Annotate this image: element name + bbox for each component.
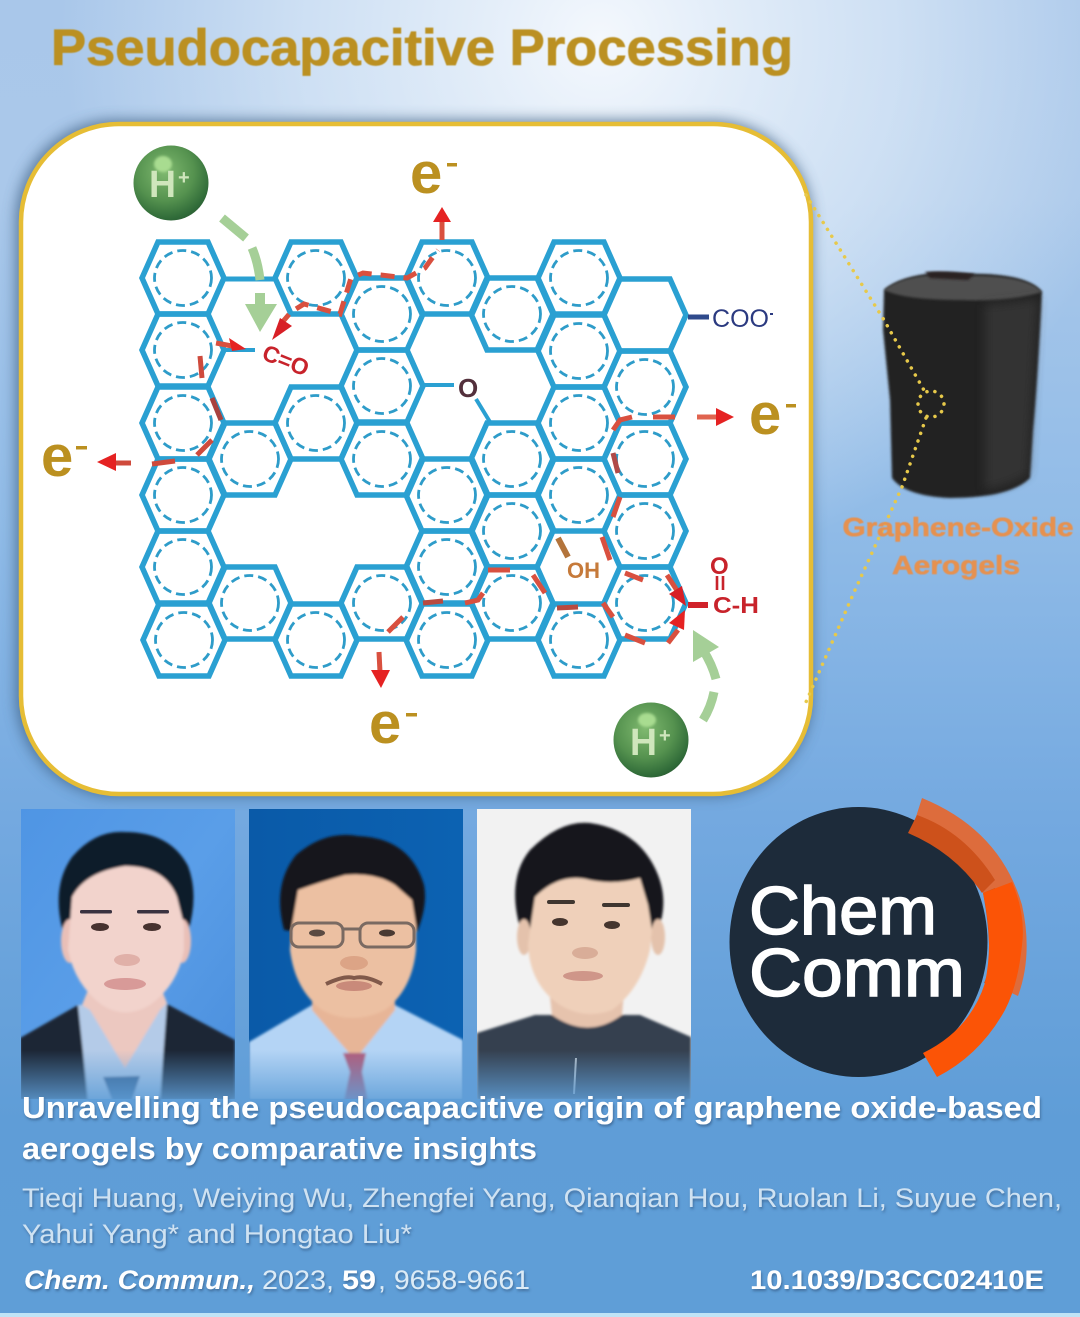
- icon: H+ proton top: [134, 146, 208, 220]
- citation: Chem. Commun.,: [24, 1265, 255, 1295]
- arrow: green proton path top: [222, 218, 277, 332]
- label: aldehyde C-H: O: [710, 553, 729, 580]
- label: COO-: [688, 305, 773, 333]
- electron path: lower: [371, 570, 685, 688]
- dotted zoom connector: [806, 195, 944, 702]
- DOI: 10.1039/D3CC02410E: [750, 1265, 1044, 1295]
- icon: H+ proton bottom: +: [659, 725, 671, 747]
- label: C=O: C=O: [259, 339, 313, 381]
- label: COO-: COO: [712, 305, 769, 333]
- article title: Unravelling the pseudocapacitive origin of graphene oxide-based: [22, 1090, 1042, 1125]
- panel: aerogel lattice diagram: [16, 120, 812, 796]
- label: electron right: [749, 382, 796, 447]
- electron path: left: [97, 356, 221, 471]
- label: electron top: e: [410, 141, 442, 206]
- authors: Tieqi Huang, Weiying Wu, Zhengfei Yang, Qianqian Hou, Ruolan Li, Suyue Chen,: [22, 1183, 1062, 1213]
- label: aldehyde C-H: C-H: [713, 592, 759, 618]
- logo: ChemComm: Comm: [749, 935, 965, 1011]
- label: OH: OH: [567, 558, 600, 583]
- portrait: author 1: [20, 809, 235, 1100]
- label: aldehyde C-H: [688, 553, 759, 618]
- article title: aerogels by comparative insights: [22, 1131, 537, 1166]
- icon: H+ proton bottom: [614, 702, 688, 778]
- aerogel label: Aerogels: [892, 550, 1020, 580]
- electron path: right: [602, 408, 734, 606]
- label: electron top: [410, 141, 457, 206]
- portrait bottom fade: [21, 1050, 691, 1100]
- citation: , 9658-9661: [378, 1265, 530, 1295]
- citation: 59: [342, 1265, 376, 1295]
- aerogel cylinder photo: [883, 271, 1042, 498]
- label: ether O: O: [458, 373, 478, 403]
- citation: [24, 1265, 530, 1295]
- article title: [22, 1090, 1042, 1166]
- portrait: author 3: [477, 809, 691, 1100]
- title: Pseudocapacitive Processing: [51, 19, 793, 76]
- citation: 2023,: [262, 1265, 334, 1295]
- aerogel label: Graphene-Oxide: [842, 512, 1074, 542]
- label: electron bottom: e: [369, 691, 401, 756]
- icon: H+ proton top: H: [149, 164, 176, 206]
- label: electron right: e: [749, 382, 781, 447]
- electron path: upper: [216, 207, 451, 351]
- icon: H+ proton bottom: H: [630, 722, 657, 764]
- arrow: green proton path bottom: [693, 630, 719, 720]
- icon: H+ proton top: +: [178, 167, 190, 189]
- aerogel label: [842, 512, 1074, 580]
- logo: ChemComm: Chem: [749, 873, 937, 949]
- label: OH: [558, 538, 600, 583]
- authors: [22, 1183, 1062, 1249]
- authors: Yahui Yang* and Hongtao Liu*: [22, 1219, 413, 1249]
- logo: ChemComm: [730, 798, 1027, 1077]
- label: electron bottom: [369, 691, 417, 756]
- portrait: author 2: [249, 809, 463, 1100]
- label: electron left: e: [41, 424, 73, 489]
- graphene lattice of hexagons: [142, 242, 686, 676]
